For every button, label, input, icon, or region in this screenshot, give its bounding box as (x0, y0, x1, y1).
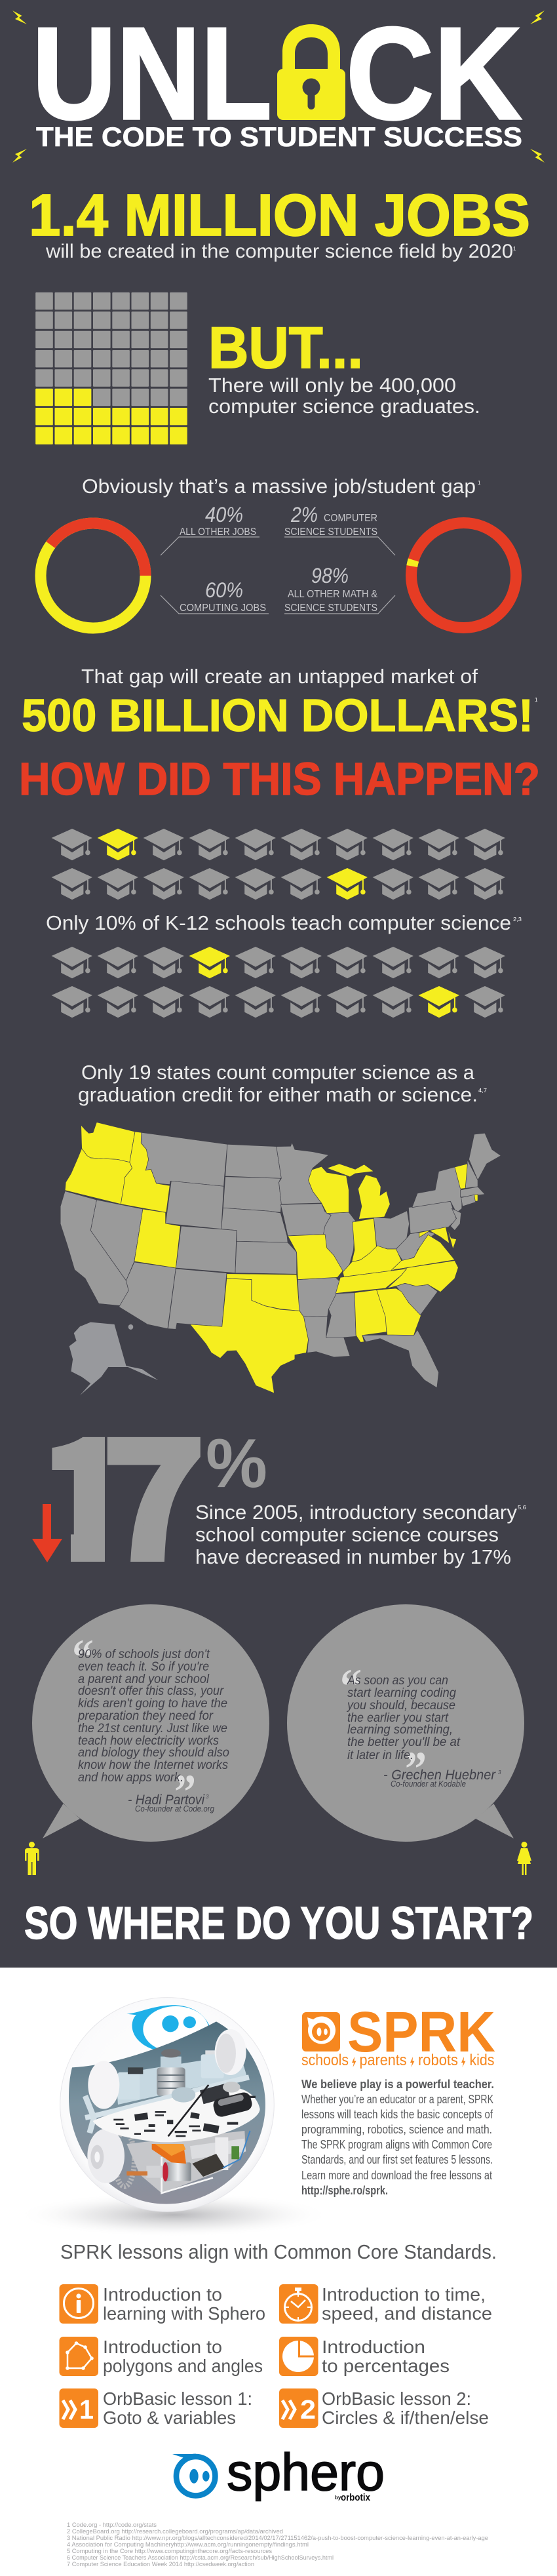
lesson: intro to Sphero: Introduction to (103, 2284, 222, 2305)
lesson: intro to Sphero: learning with Sphero (103, 2303, 265, 2324)
centre post (157, 2049, 185, 2096)
attribution: - Hadi Partovi (128, 1793, 205, 1808)
shadow under robot (16, 2192, 331, 2237)
top left wheel (88, 2061, 119, 2109)
text: secondary courses: Since 2005, introductory secondary (195, 1501, 518, 1524)
waffle chart: jobs vs graduates (35, 292, 187, 445)
footnotes: 1 Code.org - http://code.org/stats (67, 2522, 157, 2528)
footnotes: 5 Computing in the Core http://www.computinginthecore.org/facts-resources (67, 2548, 273, 2554)
title: UNLOCK: UNL (32, 1, 272, 147)
lesson: percentages: Introduction (322, 2337, 425, 2357)
glass chassis (116, 2054, 247, 2105)
logo: Sphero: by (335, 2495, 341, 2501)
text: secondary courses: have decreased in number by 17% (195, 1545, 511, 1568)
footnote marker: 1 (513, 246, 516, 252)
tagline: parents (359, 2051, 406, 2069)
quote text: a parent and your school (78, 1673, 210, 1686)
quote text: start learning coding (347, 1686, 456, 1700)
lesson: polygons and angles: polygons and angles (103, 2356, 263, 2376)
icon: pie chart (279, 2337, 318, 2376)
lesson: time speed distance: Introduction to time, (322, 2284, 486, 2305)
footnotes (67, 2522, 488, 2567)
big number: 17 percent: % (206, 1425, 267, 1502)
footnotes: 3 National Public Radio http://www.npr.org/blogs/alltechconsidered/2014/02/17/271151462/a-push-to-boost-computer-science-learning-even-at-an-early-age (67, 2535, 488, 2541)
quote text: you should, because (346, 1699, 455, 1713)
lens (172, 2087, 195, 2103)
orange block (152, 2144, 186, 2164)
label: 60 percent: 60% (205, 578, 243, 602)
lesson: percentages (279, 2337, 450, 2376)
headline: 1.4 million jobs: 1.4 MILLION JOBS (29, 183, 530, 248)
attribution: Co-founder at Code.org (135, 1804, 215, 1813)
quote text: the 21st century. Just like we (78, 1722, 227, 1735)
heading: BUT: BUT... (208, 315, 363, 380)
arrow: down (32, 1504, 62, 1562)
subtitle: THE CODE TO STUDENT SUCCESS (36, 121, 522, 152)
lesson: time speed distance: speed, and distance (322, 2303, 492, 2324)
right wheel (215, 2029, 246, 2075)
tagline: robots (418, 2051, 458, 2069)
quote text: it later in life. (347, 1749, 413, 1762)
quote text: the earlier you start (347, 1711, 449, 1725)
quote text (77, 1648, 229, 1785)
lesson: polygons and angles: Introduction to (103, 2337, 222, 2357)
lesson: intro to Sphero (59, 2284, 265, 2324)
footnotes: 7 Computer Science Education Week 2014 http://csedweek.org/action (67, 2561, 254, 2567)
quote text: kids aren't going to have the (78, 1697, 227, 1711)
board chips (113, 2096, 256, 2137)
logo: Sphero: orbotix (341, 2492, 371, 2503)
label: 98 percent (284, 564, 378, 614)
logo on ball (126, 2005, 212, 2052)
quote text: 90% of schools just don't (78, 1648, 210, 1661)
icon: padlock (277, 24, 345, 120)
footnotes: 2 CollegeBoard.org http://research.collegeboard.org/programs/ap/data/archived (67, 2528, 283, 2535)
label: 98 percent: 98% (311, 564, 349, 587)
attribution: 3 (498, 1770, 501, 1775)
big number: 17 percent: 1 (39, 1370, 134, 1605)
footnote marker: 4,7 (478, 1088, 488, 1094)
headline: how did this happen: HOW DID THIS HAPPEN? (19, 753, 540, 804)
attribution: 3 (206, 1794, 209, 1800)
quote text: learning something, (347, 1723, 453, 1737)
donut chart: jobs (41, 523, 145, 628)
icon: lesson 1: 1 (79, 2394, 94, 2425)
label: 40 percent: 40% (205, 503, 243, 526)
lesson: percentages: to percentages (322, 2356, 450, 2376)
white section background (0, 1968, 557, 2576)
label: 2 percent: SCIENCE STUDENTS (284, 526, 377, 538)
big number: 17 percent (52, 1437, 266, 1562)
text: 19 states: Only 19 states count computer science as a (81, 1061, 475, 1084)
pictogram: graduation caps bottom (52, 947, 505, 1018)
quote text: teach how electricity works (78, 1734, 219, 1748)
label: 98 percent: ALL OTHER MATH & (288, 589, 378, 600)
tagline: schools (301, 2051, 349, 2069)
map: United States (60, 1122, 501, 1395)
logo: Sphero: sphero (227, 2443, 385, 2501)
text: graduates: computer science graduates. (208, 395, 480, 418)
quote text: and biology they should also (78, 1746, 229, 1760)
speech bubble: Hadi Partovi (32, 1604, 269, 1842)
quote mark close: ” (174, 1765, 196, 1819)
label: 60 percent: COMPUTING JOBS (180, 603, 266, 614)
text: SPRK description: lessons will teach kids the basic concepts of (301, 2108, 493, 2121)
text: only 10 percent: Only 10% of K-12 schools teach computer science (46, 911, 511, 934)
logo icon (302, 2012, 340, 2051)
logo mark (172, 2453, 215, 2495)
text: SPRK description: Standards, and our first set features 5 lessons. (301, 2153, 493, 2166)
tagline (301, 2051, 494, 2069)
text: SPRK description: programming, robotics, science and math. (301, 2123, 492, 2136)
big number: 17 percent: 7 (103, 1370, 204, 1605)
quote mark open: “ (340, 1659, 362, 1714)
icon: male figure (25, 1842, 39, 1875)
footnote marker: 5,6 (518, 1505, 527, 1511)
quote text: preparation they need for (77, 1709, 214, 1723)
icon: lesson 2 (279, 2388, 318, 2428)
footnote marker: 2,3 (513, 917, 522, 922)
text: graduates (208, 374, 480, 418)
lesson: OrbBasic 2 (279, 2388, 489, 2428)
logo: SPRK: SPRK (347, 2000, 495, 2064)
antenna rod (168, 2085, 208, 2136)
black components (200, 2082, 254, 2118)
text: secondary courses: school computer science courses (195, 1523, 499, 1546)
lesson: polygons and angles (59, 2337, 263, 2376)
heading: lessons align: SPRK lessons align with Common Core Standards. (60, 2240, 497, 2263)
quote text: the better you'll be at (347, 1735, 461, 1749)
lower wheel and gear (87, 2129, 134, 2187)
text: jobs created: will be created in the computer science field by 2020 (45, 241, 513, 262)
glass tube (85, 2077, 249, 2118)
speech bubble: Grechen Huebner (287, 1604, 524, 1842)
text: SPRK description: We believe play is a powerful teacher. (301, 2078, 494, 2091)
attribution (128, 1793, 215, 1813)
motor housing (126, 2131, 246, 2193)
circuit board (93, 2087, 260, 2142)
icon: female figure (517, 1842, 531, 1875)
text: SPRK description: http://sphe.ro/sprk. (301, 2184, 388, 2197)
icon: lesson 2: 2 (300, 2394, 316, 2425)
quote text: know how the Internet works (78, 1758, 228, 1772)
icon: lesson 1 (59, 2388, 98, 2428)
text: 19 states: graduation credit for either math or science. (78, 1083, 478, 1106)
text: secondary courses (195, 1501, 518, 1568)
footnotes: 6 Computer Science Teachers Association http://csta.acm.org/Research/sub/HighSchoolSurveys.html (67, 2554, 334, 2561)
quote text (346, 1674, 461, 1762)
lesson: OrbBasic 2: OrbBasic lesson 2: (322, 2388, 471, 2409)
label: 98 percent: SCIENCE STUDENTS (284, 603, 377, 614)
icon: polygon (59, 2337, 98, 2376)
quote mark open: “ (72, 1630, 94, 1684)
lesson: OrbBasic 1: OrbBasic lesson 1: (103, 2388, 252, 2409)
footnotes: 4 Association for Computing Machineryhttp://www.acm.org/runningonempty/findings.html (67, 2541, 309, 2548)
lesson: OrbBasic 1 (59, 2388, 252, 2428)
text: SPRK description: Whether you’re an educator or a parent, SPRK (301, 2093, 493, 2106)
label: 40 percent: ALL OTHER JOBS (180, 526, 256, 538)
label: 60 percent (180, 578, 266, 614)
pictogram: graduation caps top (52, 829, 505, 900)
attribution: Co-founder at Kodable (391, 1779, 466, 1789)
lesson: time speed distance (279, 2284, 492, 2324)
text: graduates: There will only be 400,000 (208, 374, 456, 397)
lesson: OrbBasic 2: Circles & if/then/else (322, 2408, 489, 2428)
text: job student gap: Obviously that’s a massive job/student gap (82, 475, 476, 498)
donut chart: students (412, 523, 516, 628)
footnote marker: 1 (478, 480, 481, 486)
logo: SPRK (301, 2000, 495, 2069)
motor (126, 2162, 191, 2181)
title: UNLOCK (32, 1, 522, 147)
page background (0, 0, 557, 1968)
tagline: kids (469, 2051, 494, 2069)
text: untapped market: That gap will create an untapped market of (81, 665, 478, 688)
text: SPRK description (301, 2078, 494, 2197)
lightning bolts corners (12, 10, 545, 163)
icon: stopwatch (279, 2284, 318, 2324)
leader lines (161, 537, 395, 614)
quote text: doesn't offer this class, your (78, 1684, 224, 1698)
quote mark close: ” (405, 1742, 427, 1796)
quote text: As soon as you can (347, 1674, 448, 1688)
label: 40 percent (180, 503, 256, 538)
quote text: and how apps work. (78, 1771, 183, 1785)
attribution: - Grechen Huebner (383, 1768, 496, 1783)
label: 2 percent (284, 503, 377, 538)
headline: 500 billion dollars: 500 BILLION DOLLARS! (22, 690, 533, 741)
quote text: even teach it. So if you're (78, 1660, 209, 1674)
icon: info (59, 2284, 98, 2324)
illustration: Sphero robot (60, 1998, 274, 2211)
label: 2 percent: COMPUTER (324, 513, 377, 524)
text: SPRK description: The SPRK program aligns with Common Core (301, 2138, 492, 2151)
text: 19 states (78, 1061, 478, 1106)
title: UNLOCK: CK (346, 1, 522, 147)
footnote marker: 1 (535, 697, 538, 703)
label: 2 percent: 2% (290, 503, 318, 526)
text: SPRK description: Learn more and download the free lessons at (301, 2169, 492, 2182)
lesson: OrbBasic 1: Goto & variables (103, 2408, 236, 2428)
